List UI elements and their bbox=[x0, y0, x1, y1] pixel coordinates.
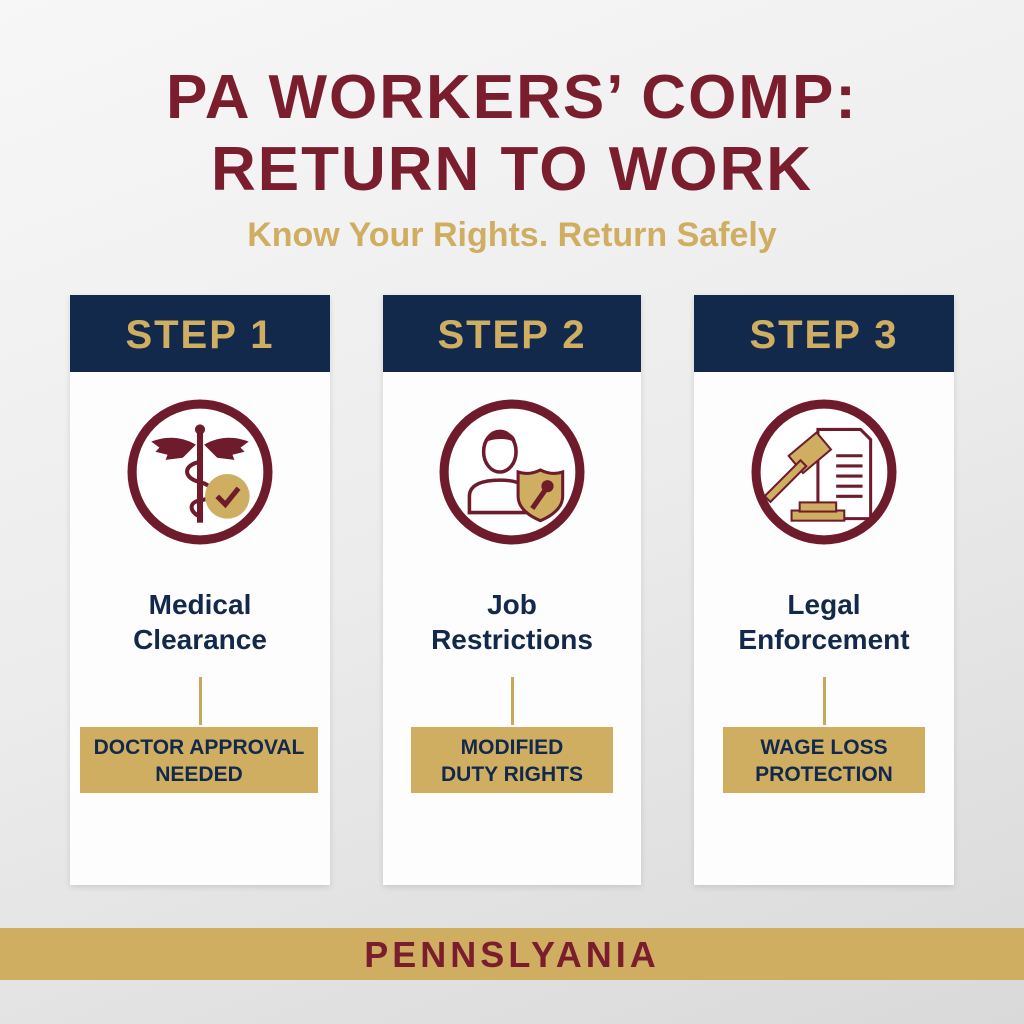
icon: gavel and document bbox=[752, 400, 896, 544]
header step 2: STEP 2 bbox=[437, 313, 587, 357]
icon: caduceus with check bbox=[128, 400, 272, 544]
callout: modified duty bbox=[411, 727, 613, 793]
panel: step 2 bbox=[383, 295, 641, 885]
label step 3: Enforcement bbox=[738, 624, 910, 655]
callout: wage loss bbox=[723, 727, 925, 793]
label step 1: Medical bbox=[149, 589, 251, 620]
footer banner: PENNSLYANIA bbox=[364, 934, 660, 975]
callout: doctor approval: NEEDED bbox=[155, 763, 243, 786]
callout: modified duty: DUTY RIGHTS bbox=[441, 763, 583, 786]
header step 1: STEP 1 bbox=[125, 313, 275, 357]
title: PA WORKERS’ COMP: bbox=[166, 63, 858, 132]
panel: step 1 bbox=[70, 295, 330, 885]
header step 2 bbox=[383, 295, 641, 372]
header step 3: STEP 3 bbox=[749, 313, 899, 357]
panel: step 3 bbox=[694, 295, 954, 885]
title: RETURN TO WORK bbox=[211, 135, 813, 204]
header step 1 bbox=[70, 295, 330, 372]
title bbox=[166, 63, 858, 204]
footer banner bbox=[0, 928, 1024, 980]
label step 2: Restrictions bbox=[431, 624, 593, 655]
callout: wage loss: WAGE LOSS bbox=[760, 736, 888, 759]
label step 2: Job bbox=[487, 589, 537, 620]
icon: person with shield bbox=[440, 400, 584, 544]
label step 2 bbox=[431, 589, 593, 655]
label step 1 bbox=[133, 589, 267, 655]
callout: wage loss: PROTECTION bbox=[755, 763, 893, 786]
callout: doctor approval bbox=[80, 727, 318, 793]
callout: doctor approval: DOCTOR APPROVAL bbox=[94, 736, 304, 759]
label step 1: Clearance bbox=[133, 624, 267, 655]
header step 3 bbox=[694, 295, 954, 372]
subtitle: Know Your Rights. Return Safely bbox=[247, 216, 777, 254]
label step 3: Legal bbox=[787, 589, 861, 620]
label step 3 bbox=[738, 589, 910, 655]
callout: modified duty: MODIFIED bbox=[461, 736, 563, 759]
